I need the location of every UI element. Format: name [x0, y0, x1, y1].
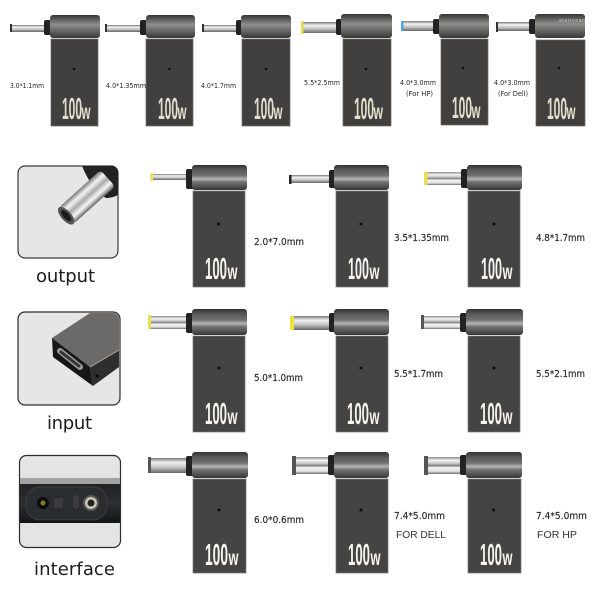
- adapter: 4.0*3.0mm for Dell: 100: [547, 91, 567, 126]
- adapter: 4.0*1.7mm: 100: [254, 91, 274, 126]
- adapter: 5.0*1.0mm: 100: [205, 396, 227, 431]
- adapter: 5.5*2.1mm: [421, 309, 523, 432]
- adapter: 5.0*1.0mm: w: [227, 406, 238, 429]
- label: 3.0*1.1mm: 3.0*1.1mm: [10, 82, 44, 90]
- adapter: 4.0*3.0mm for HP: 100: [452, 90, 472, 125]
- adapter: 4.0*1.35mm: [105, 15, 195, 126]
- adapter: 7.4*5.0mm for HP: 100: [480, 537, 502, 572]
- adapter: 3.0*1.1mm: [10, 15, 100, 126]
- panel: interface thumbnail: [20, 456, 120, 548]
- adapter: 5.0*1.0mm: [148, 309, 247, 432]
- adapter: 5.5*2.5mm: w: [373, 101, 383, 124]
- adapter: 4.0*1.35mm: w: [177, 101, 187, 124]
- label: 4.0*1.7mm: 4.0*1.7mm: [201, 82, 236, 90]
- adapter: 4.8*1.7mm: 100: [481, 251, 502, 286]
- label: 5.5*2.1mm: 5.5*2.1mm: [536, 369, 585, 380]
- panel: output thumbnail: [18, 166, 118, 258]
- label: 7.4*5.0mm FOR DELL: FOR DELL: [396, 529, 446, 541]
- label: 5.5*2.5mm: 5.5*2.5mm: [304, 79, 340, 87]
- label: 4.0*3.0mm For HP: 4.0*3.0mm: [400, 79, 436, 87]
- adapter: 6.0*0.6mm: 100: [205, 537, 228, 572]
- caption: input: input: [47, 413, 92, 434]
- label: 2.0*7.0mm: 2.0*7.0mm: [254, 237, 304, 248]
- label: 7.4*5.0mm FOR DELL: [394, 511, 446, 541]
- adapter: 7.4*5.0mm for Dell: [292, 452, 389, 573]
- label: 7.4*5.0mm FOR HP: [536, 511, 587, 541]
- adapter: 4.0*1.7mm: [202, 15, 291, 126]
- adapter: 4.8*1.7mm: w: [502, 261, 513, 284]
- adapter: 4.0*3.0mm for HP: w: [471, 100, 481, 123]
- adapter: 2.0*7.0mm: 100: [205, 251, 227, 286]
- adapter: 4.8*1.7mm: [424, 165, 522, 287]
- adapter: 5.5*2.1mm: 100: [480, 396, 502, 431]
- label: 5.0*1.0mm: 5.0*1.0mm: [254, 373, 303, 384]
- adapter: 5.5*1.7mm: w: [369, 406, 380, 429]
- adapter: 6.0*0.6mm: [148, 452, 248, 573]
- adapter: 7.4*5.0mm for HP: w: [502, 547, 513, 570]
- label: 4.8*1.7mm: 4.8*1.7mm: [536, 233, 585, 244]
- adapter: 3.0*1.1mm: 100: [62, 91, 82, 126]
- adapter: 3.5*1.35mm: 100: [348, 251, 369, 286]
- adapter: 5.5*2.5mm: 100: [354, 91, 374, 126]
- label: 7.4*5.0mm FOR HP: 7.4*5.0mm: [536, 511, 587, 522]
- label: 3.5*1.35mm: 3.5*1.35mm: [394, 233, 449, 244]
- adapter: 5.5*1.7mm: [290, 309, 389, 432]
- label: 4.0*3.0mm For Dell: 4.0*3.0mm: [494, 79, 530, 87]
- panel: input thumbnail: [18, 312, 120, 405]
- label: 7.4*5.0mm FOR HP: FOR HP: [537, 529, 577, 541]
- label: 7.4*5.0mm FOR DELL: 7.4*5.0mm: [394, 511, 445, 522]
- adapter: 4.0*1.7mm: w: [273, 101, 283, 124]
- caption: interface: interface: [34, 559, 115, 580]
- adapter: 4.0*3.0mm for HP: [401, 14, 489, 125]
- label: 4.0*3.0mm For HP: (For HP): [406, 90, 433, 98]
- adapter: 5.5*2.5mm: [301, 14, 392, 126]
- label: 4.0*3.0mm For Dell: (For Dell): [498, 90, 528, 98]
- adapter: 7.4*5.0mm for Dell: w: [370, 547, 381, 570]
- label: 5.5*1.7mm: 5.5*1.7mm: [394, 369, 443, 380]
- adapter: 7.4*5.0mm for HP: [424, 452, 522, 573]
- adapter: 4.0*3.0mm for Dell: [496, 14, 585, 126]
- adapter: 2.0*7.0mm: [150, 165, 247, 287]
- adapter: 2.0*7.0mm: w: [227, 261, 238, 284]
- adapter: 5.5*2.1mm: w: [502, 406, 513, 429]
- adapter: 6.0*0.6mm: w: [228, 547, 239, 570]
- label: 4.0*3.0mm For Dell: [494, 79, 530, 98]
- adapter: 3.5*1.35mm: [289, 165, 389, 287]
- adapter: 4.0*1.35mm: 100: [158, 91, 178, 126]
- adapter: 5.5*1.7mm: 100: [347, 396, 369, 431]
- label: 6.0*0.6mm: 6.0*0.6mm: [254, 515, 304, 526]
- adapter: 7.4*5.0mm for Dell: 100: [348, 537, 370, 572]
- watermark: alaricean: [559, 18, 585, 24]
- adapter: 4.0*3.0mm for Dell: w: [566, 101, 576, 124]
- adapter: 3.5*1.35mm: w: [369, 261, 380, 284]
- adapter: 3.0*1.1mm: w: [81, 101, 91, 124]
- label: 4.0*3.0mm For HP: [400, 79, 436, 98]
- label: 4.0*1.35mm: 4.0*1.35mm: [106, 82, 146, 90]
- caption: output: output: [36, 266, 95, 287]
